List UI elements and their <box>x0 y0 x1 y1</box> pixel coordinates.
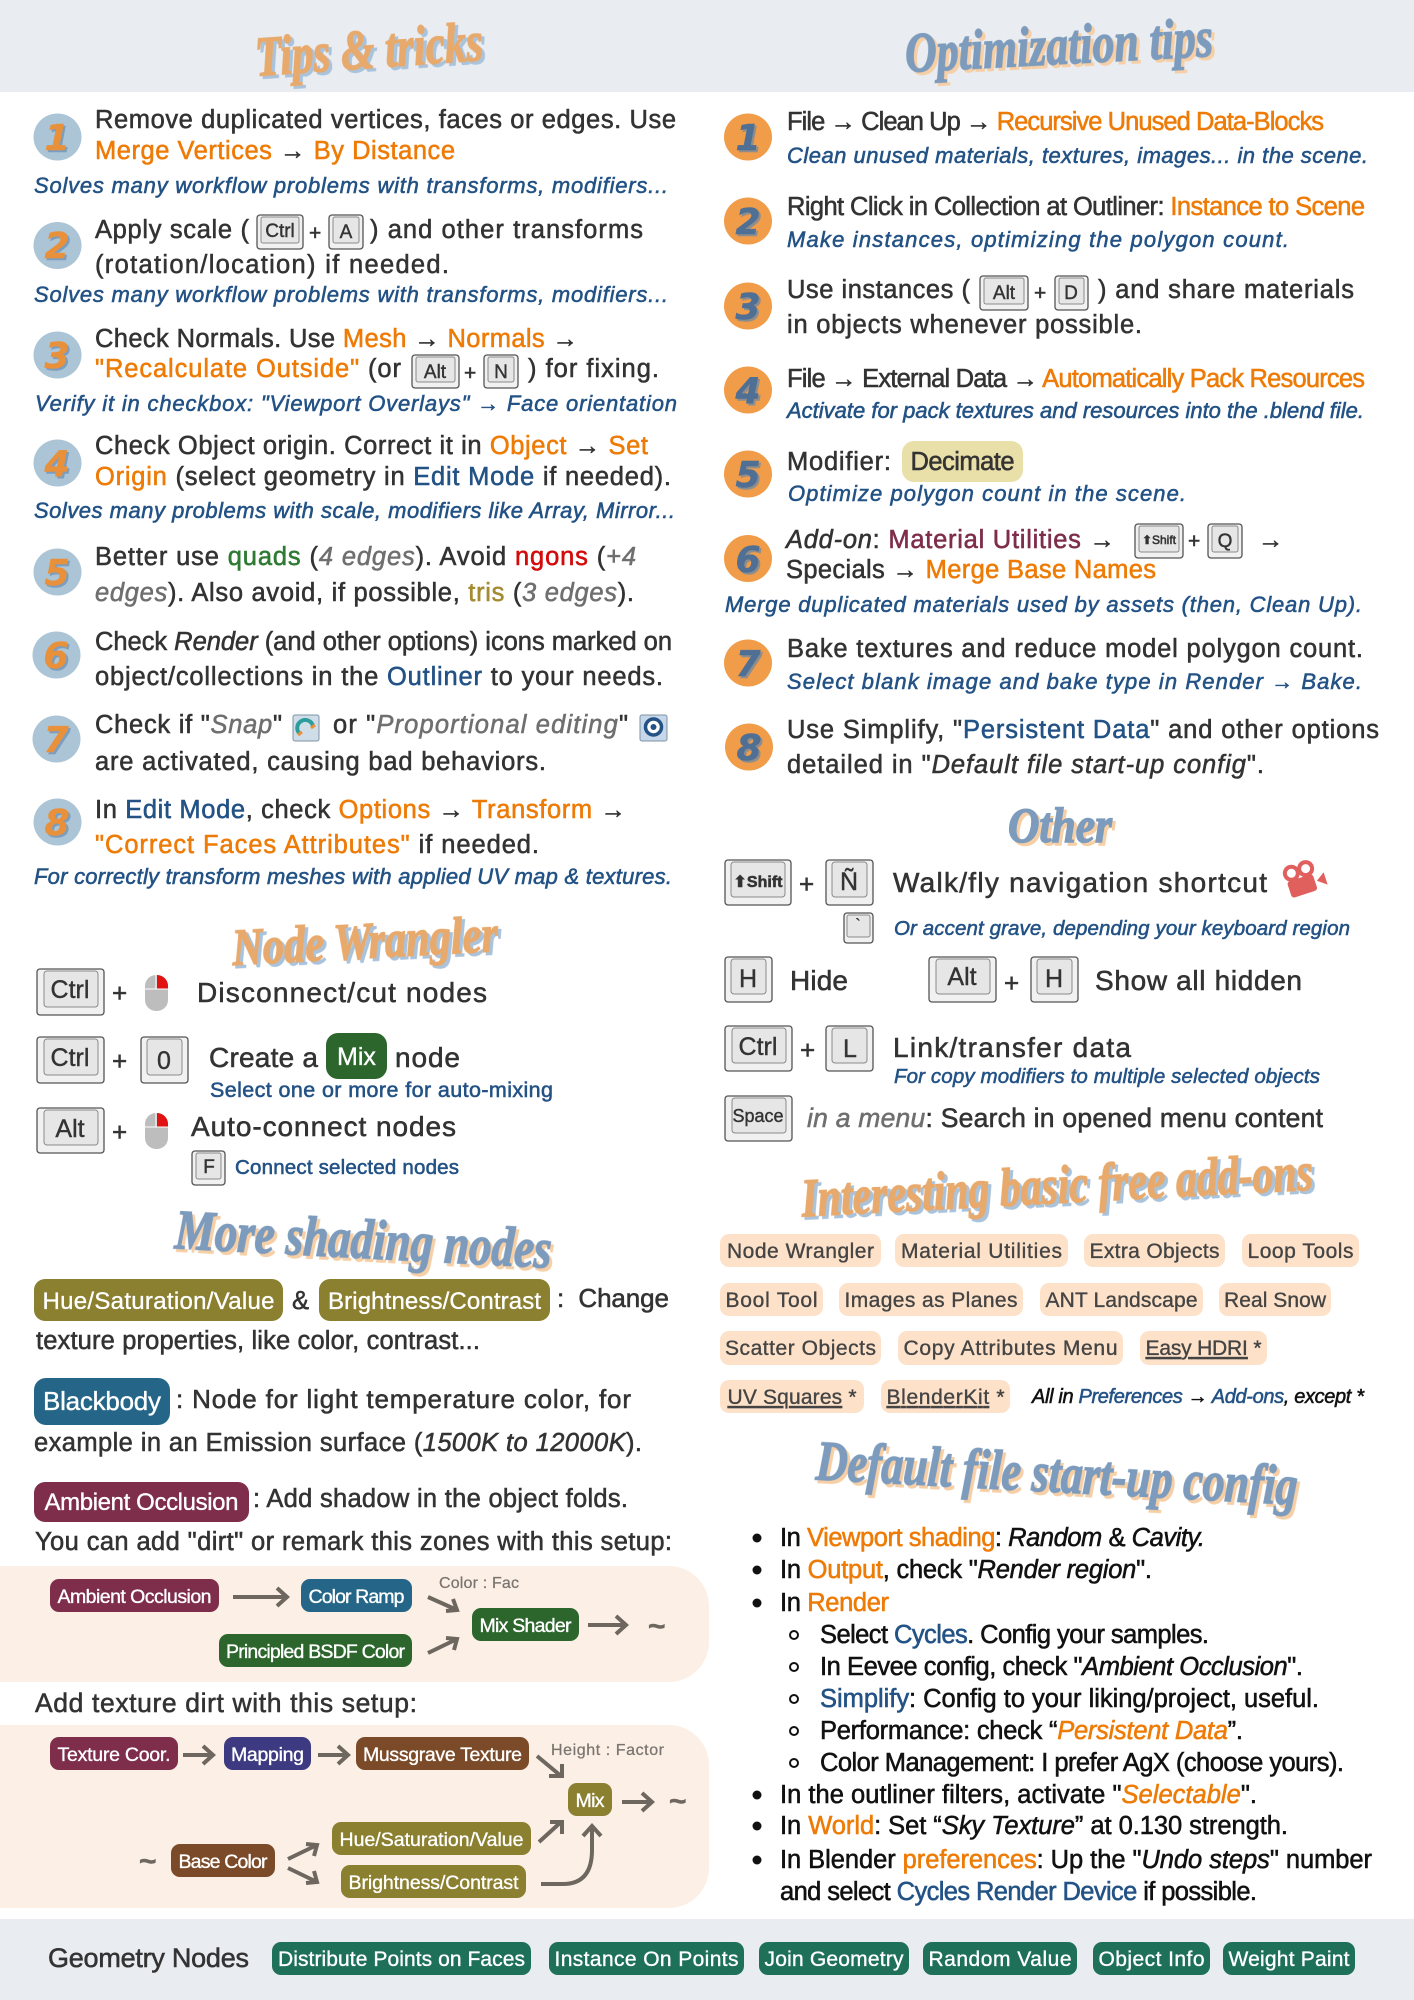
arrow <box>428 1597 457 1611</box>
key: H <box>1031 957 1078 1002</box>
tip 4 note: Solves many problems with scale, modifiers like Array, Mirror... <box>34 498 675 523</box>
pill: Decimate: Decimate <box>910 448 1014 476</box>
tip 1 text: Remove duplicated vertices, faces or edges. Use <box>95 106 676 134</box>
number badge 7 <box>32 716 80 762</box>
label: create a: Create a <box>209 1042 318 1073</box>
note: Or accent grave, depending your keyboard region <box>894 917 1350 940</box>
pill: Object Info <box>1093 1942 1210 1975</box>
tip 2 <box>34 215 668 307</box>
pill: Extra Objects: Extra Objects <box>1090 1240 1220 1263</box>
sub-item: eevee: In Eevee config, check "Ambient Occlusion". <box>820 1653 1303 1681</box>
item: preferences line 2: and select Cycles Render Device if possible. <box>780 1878 1257 1906</box>
node: Mapping: Mapping <box>231 1744 304 1766</box>
arrow <box>539 1822 562 1842</box>
description line 2: texture properties, like color, contrast... <box>36 1327 480 1355</box>
pill: UV Squares: UV Squares * <box>728 1386 856 1409</box>
arrow <box>288 1844 317 1859</box>
key: Ctrl <box>257 215 303 249</box>
number badge 5: 5 <box>44 553 70 594</box>
node pill: Ambient Occlusion: Ambient Occlusion <box>44 1489 238 1516</box>
tip 4 line 2: Origin (select geometry in Edit Mode if needed). <box>95 463 671 491</box>
label: auto-connect: Auto-connect nodes <box>191 1111 456 1142</box>
item: world: In World: Set “Sky Texture” at 0.130 strength. <box>780 1812 1288 1840</box>
plus: + <box>464 362 476 385</box>
node: Brightness/Contrast <box>341 1865 526 1898</box>
opt tip 5 <box>724 441 1186 506</box>
key: Shift: ⬆Shift <box>1142 533 1177 547</box>
opt tip 3 <box>724 276 1354 339</box>
line 2: in objects whenever possible. <box>787 311 1142 339</box>
pill: Weight Paint: Weight Paint <box>1228 1948 1350 1971</box>
number badge 4 <box>34 440 82 486</box>
note: Activate for pack textures and resources into the .blend file. <box>785 398 1364 423</box>
key: Q <box>1208 524 1242 558</box>
shortcut: alt right click <box>37 1108 459 1185</box>
pill: UV Squares <box>720 1380 864 1413</box>
item: output: In Output, check "Render region". <box>780 1556 1152 1584</box>
text: Right Click in Collection at Outliner: Instance to Scene <box>787 193 1365 221</box>
label: walk fly: Walk/fly navigation shortcut <box>893 867 1267 898</box>
title: Node Wrangler: Node Wrangler <box>230 906 500 977</box>
key: L <box>826 1026 873 1071</box>
label: hide: Hide <box>790 965 848 996</box>
text: Use instances ( <box>787 276 970 304</box>
number badge 1: 1 <box>735 118 761 159</box>
opt tip 1 <box>724 108 1368 168</box>
tip 4 text: Check Object origin. Correct it in Object → Set <box>95 432 648 460</box>
node pill: Hue/Saturation/Value: Hue/Saturation/Value <box>42 1288 274 1315</box>
node: Principled BSDF Color: Principled BSDF Color <box>226 1641 406 1663</box>
opt tip 7 <box>724 635 1363 694</box>
pill: Random Value: Random Value <box>928 1948 1072 1971</box>
key: 0 <box>141 1037 188 1083</box>
number badge 6: 6 <box>735 540 761 581</box>
pill: Bool Tool: Bool Tool <box>726 1289 818 1312</box>
pill: ANT Landscape <box>1040 1283 1203 1316</box>
plus: + <box>309 222 321 245</box>
pill: Material Utilities: Material Utilities <box>901 1240 1062 1263</box>
band background <box>0 1919 1414 2000</box>
key: Ctrl <box>37 1037 104 1083</box>
number badge 7: 7 <box>735 644 761 685</box>
tip 1 note: Solves many workflow problems with transforms, modifiers... <box>34 173 668 198</box>
number badge 5: 5 <box>735 455 761 496</box>
footer band: geometry nodes <box>0 1919 1414 2000</box>
sub-item: simplify: Simplify: Config to your liking/project, useful. <box>820 1685 1319 1713</box>
key: Ñ: Ñ <box>840 867 858 896</box>
text: Use Simplify, "Persistent Data" and other options <box>787 716 1379 744</box>
tip 2 note: Solves many workflow problems with transforms, modifiers... <box>34 282 668 307</box>
text: File → External Data → Automatically Pack Resources <box>787 365 1365 393</box>
node: Texture Coor. <box>50 1737 178 1770</box>
key: accent grave: ` <box>856 916 860 933</box>
key: Ñ <box>826 860 873 905</box>
icon: mouse <box>145 1113 168 1149</box>
symbol: tilde: ~ <box>648 1610 666 1643</box>
label: search: in a menu: Search in opened menu content <box>807 1103 1324 1133</box>
description: : Add shadow in the object folds. <box>253 1485 628 1513</box>
label: Color Fac: Color : Fac <box>439 1575 519 1592</box>
key: Ctrl: Ctrl <box>265 221 295 242</box>
icon: mouse <box>145 975 168 1011</box>
note: For copy modifiers to multiple selected objects <box>894 1065 1320 1088</box>
pill: BlenderKit <box>881 1380 1010 1413</box>
plus: + <box>112 1117 127 1147</box>
node pill: Blackbody <box>34 1378 170 1425</box>
number badge 8 <box>34 798 82 846</box>
node pill: Blackbody: Blackbody <box>43 1386 161 1416</box>
plus: + <box>800 1035 815 1065</box>
label: disconnect: Disconnect/cut nodes <box>197 977 487 1008</box>
pill: Material Utilities <box>895 1234 1068 1267</box>
node pill: Mix: Mix <box>337 1043 376 1071</box>
number badge 7: 7 <box>43 720 69 761</box>
panel: default config list <box>752 1524 1372 1906</box>
panel: tips and tricks list <box>32 106 677 889</box>
pill: Bool Tool <box>720 1283 823 1316</box>
node: Color Ramp: Color Ramp <box>308 1586 405 1608</box>
note: Select blank image and bake type in Render → Bake. <box>787 669 1362 694</box>
description: : Node for light temperature color, for <box>176 1384 631 1414</box>
tip 3 <box>34 325 677 416</box>
arrow <box>622 1793 652 1811</box>
arrow <box>537 1756 562 1776</box>
sub-item: cycles: Select Cycles. Config your samples. <box>820 1621 1209 1649</box>
icon: proportional editing <box>640 715 667 741</box>
title: Other: Other <box>1008 797 1112 853</box>
note: Clean unused materials, textures, images... in the scene. <box>787 143 1368 168</box>
panel: dirt setup diagram <box>0 1566 709 1682</box>
label: Height Factor: Height : Factor <box>551 1742 665 1759</box>
tip 6 text: Check Render (and other options) icons marked on <box>95 628 672 656</box>
pill: Loop Tools <box>1242 1234 1359 1267</box>
pill: Easy HDRI: Easy HDRI * <box>1146 1337 1262 1360</box>
text end: ) and share materials <box>1098 276 1354 304</box>
key: Ctrl <box>725 1026 792 1071</box>
pill: Images as Planes <box>839 1283 1023 1316</box>
pill: Scatter Objects <box>720 1331 881 1365</box>
description line 2: You can add "dirt" or remark this zones with this setup: <box>35 1528 672 1556</box>
note: Optimize polygon count in the scene. <box>788 481 1186 506</box>
pill: Distribute Points on Faces <box>272 1942 531 1975</box>
pill: Real Snow <box>1219 1283 1331 1316</box>
symbol: tilde: ~ <box>139 1845 157 1878</box>
pill: Extra Objects <box>1084 1234 1225 1267</box>
node pill: Ambient Occlusion <box>34 1482 249 1522</box>
text: Bake textures and reduce model polygon count. <box>787 635 1363 663</box>
heading: texture dirt setup: Add texture dirt with this setup: <box>35 1688 417 1718</box>
opt tip 6 <box>724 524 1362 617</box>
number badge 8: 8 <box>44 803 70 844</box>
pill: Decimate <box>902 441 1023 482</box>
node pill: Mix <box>326 1033 387 1079</box>
tip 5 text: Better use quads (4 edges). Avoid ngons (+4 <box>95 543 636 571</box>
key: F: F <box>203 1157 215 1178</box>
number badge 4 <box>724 366 772 414</box>
pill: Weight Paint <box>1223 1942 1355 1975</box>
key: Alt <box>37 1108 104 1153</box>
number badge 1 <box>724 114 772 160</box>
tip 5 <box>34 543 636 607</box>
arrow <box>428 1638 457 1653</box>
tip 7 text: Check if "Snap" <box>95 711 282 739</box>
plus: + <box>112 978 127 1008</box>
key: Ctrl: Ctrl <box>739 1033 777 1061</box>
item: preferences: In Blender preferences: Up the "Undo steps" number <box>780 1846 1372 1874</box>
pill: Scatter Objects: Scatter Objects <box>725 1337 876 1360</box>
tip 3 text: Check Normals. Use Mesh → Normals → <box>95 325 578 353</box>
key: H: H <box>739 965 757 993</box>
key: A <box>329 215 363 249</box>
pill: Loop Tools: Loop Tools <box>1248 1240 1354 1263</box>
opt tip 4 <box>724 365 1365 423</box>
tip 3 note: Verify it in checkbox: "Viewport Overlays" → Face orientation <box>35 391 677 416</box>
number badge 8 <box>725 724 773 770</box>
number badge 3 <box>724 282 772 330</box>
arrow <box>588 1616 626 1634</box>
key: Alt <box>980 276 1028 310</box>
key: N <box>484 355 518 388</box>
note: Merge duplicated materials used by assets (then, Clean Up). <box>725 592 1362 617</box>
key: 0: 0 <box>157 1047 171 1075</box>
key: A: A <box>340 222 353 243</box>
title: More shading nodes: More shading nodes <box>173 1199 553 1281</box>
item: render: In Render <box>780 1589 890 1617</box>
pill: Real Snow: Real Snow <box>1224 1289 1327 1312</box>
tip 7 <box>32 711 667 776</box>
node: Ambient Occlusion <box>50 1579 219 1612</box>
arrow: curved <box>541 1826 601 1884</box>
item: outliner: In the outliner filters, activate "Selectable". <box>780 1781 1257 1809</box>
plus: + <box>1034 282 1046 305</box>
footer heading: Geometry Nodes <box>48 1943 249 1973</box>
key: Ctrl: Ctrl <box>51 976 89 1004</box>
tip 7 text mid: or "Proportional editing" <box>333 711 628 739</box>
number badge 1 <box>34 114 82 160</box>
tip 3 line 2: "Recalculate Outside" (or <box>95 355 402 383</box>
sub-item: performance: Performance: check “Persistent Data”. <box>820 1717 1243 1745</box>
line 2: detailed in "Default file start-up config". <box>787 751 1264 779</box>
tip 7 line 2: are activated, causing bad behaviors. <box>95 748 546 776</box>
tip 1 <box>34 106 676 198</box>
icon: snap magnet <box>293 715 319 741</box>
node: Texture Coor.: Texture Coor. <box>58 1744 170 1766</box>
tip 5 line 2: edges). Also avoid, if possible, tris (3 edges). <box>95 579 634 607</box>
pill: Join Geometry <box>759 1942 909 1975</box>
description line 2: example in an Emission surface (1500K to 12000K). <box>34 1429 642 1457</box>
node: Base Color: Base Color <box>178 1851 268 1873</box>
number badge 5 <box>724 450 772 498</box>
pill: Images as Planes: Images as Planes <box>844 1289 1018 1312</box>
pill: Instance On Points <box>549 1942 744 1975</box>
node: Mussgrave Texture <box>356 1737 529 1770</box>
node: Mix <box>568 1783 612 1816</box>
node: Mapping <box>224 1737 311 1770</box>
number badge 7 <box>724 640 772 686</box>
line 2: Specials → Merge Base Names <box>786 556 1156 584</box>
opt tip 2 <box>724 193 1365 252</box>
key: D <box>1055 276 1088 310</box>
item: viewport shading: In Viewport shading: Random & Cavity. <box>780 1524 1205 1552</box>
key: Shift <box>725 860 791 905</box>
key: Alt: Alt <box>55 1115 85 1143</box>
key: Ctrl <box>37 969 104 1015</box>
key: Q: Q <box>1218 531 1232 552</box>
number badge 3: 3 <box>735 287 761 328</box>
node: Hue/Saturation/Value: Hue/Saturation/Value <box>340 1829 524 1851</box>
node: Color Ramp <box>301 1579 412 1612</box>
number badge 2: 2 <box>735 202 761 243</box>
pill: Join Geometry: Join Geometry <box>764 1948 904 1971</box>
number badge 8: 8 <box>736 728 762 769</box>
note: preferences: All in Preferences → Add-ons, except * <box>1031 1386 1365 1408</box>
icon: camera <box>1283 858 1328 898</box>
panel: add-ons <box>720 1234 1365 1413</box>
node: Hue/Saturation/Value <box>332 1822 531 1855</box>
label: show all hidden: Show all hidden <box>1095 965 1302 996</box>
arrow <box>288 1868 317 1883</box>
number badge 3: 3 <box>44 336 70 377</box>
number badge 1: 1 <box>44 118 70 159</box>
tip 8 text: In Edit Mode, check Options → Transform → <box>95 796 626 824</box>
pill: Node Wrangler <box>720 1234 881 1267</box>
text: Modifier: <box>787 448 891 476</box>
tip 2 line 2: (rotation/location) if needed. <box>95 251 449 279</box>
key: Shift <box>1135 524 1183 558</box>
description: : Change <box>557 1283 669 1313</box>
node pill: Hue/Saturation/Value <box>34 1279 283 1321</box>
tip 6 <box>32 628 672 691</box>
key: Alt <box>412 355 459 388</box>
tip 6 line 2: object/collections in the Outliner to your needs. <box>95 663 663 691</box>
panel background <box>0 1725 709 1908</box>
opt tip 8 <box>725 716 1379 779</box>
note: Make instances, optimizing the polygon count. <box>787 227 1289 252</box>
pill: BlenderKit: BlenderKit * <box>886 1386 1004 1409</box>
node pill: Brightness/Contrast: Brightness/Contrast <box>328 1288 541 1315</box>
tip 2 text start: Apply scale ( <box>95 216 250 244</box>
arrow <box>233 1588 287 1606</box>
key: D: D <box>1064 283 1078 304</box>
note: Select one or more for auto-mixing <box>210 1078 553 1102</box>
shortcut: ctrl right click <box>37 969 487 1015</box>
key: Alt: Alt <box>993 283 1016 304</box>
symbol: tilde: ~ <box>669 1785 687 1818</box>
number badge 5 <box>34 548 82 596</box>
number badge 4: 4 <box>734 371 761 412</box>
panel background <box>0 1566 709 1682</box>
node: Mix Shader <box>472 1608 579 1641</box>
key: Space: Space <box>732 1106 784 1126</box>
text: File → Clean Up → Recursive Unused Data-Blocks <box>787 108 1324 136</box>
number badge 2: 2 <box>44 226 70 267</box>
pill: Random Value <box>923 1942 1077 1975</box>
tip 4 <box>34 432 675 523</box>
pill: Object Info: Object Info <box>1098 1948 1204 1971</box>
number badge 6 <box>32 632 80 678</box>
key: Space <box>725 1096 792 1141</box>
number badge 2 <box>724 198 772 244</box>
number badge 4: 4 <box>43 444 70 485</box>
sub-item: color management: Color Management: I prefer AgX (choose yours). <box>820 1749 1344 1777</box>
key: L: L <box>843 1035 857 1063</box>
node: Ambient Occlusion: Ambient Occlusion <box>58 1586 212 1608</box>
plus: + <box>1188 530 1200 553</box>
number badge 2 <box>34 222 82 269</box>
pill: Easy HDRI <box>1140 1331 1267 1365</box>
pill: Copy Attributes Menu <box>898 1331 1123 1365</box>
panel: texture dirt diagram <box>0 1725 709 1908</box>
key: Shift: ⬆Shift <box>734 874 783 891</box>
tip 3 text end: ) for fixing. <box>528 355 659 383</box>
plus: + <box>112 1046 127 1076</box>
key: Alt <box>929 957 996 1002</box>
key: accent grave <box>844 913 873 943</box>
number badge 3 <box>34 332 82 378</box>
pill: Copy Attributes Menu: Copy Attributes Menu <box>904 1337 1118 1360</box>
title: Optimization tips: Optimization tips <box>903 7 1214 85</box>
plus: + <box>799 869 814 899</box>
key: Ctrl: Ctrl <box>51 1044 89 1072</box>
panel: optimization tips <box>724 108 1379 779</box>
panel: more shading nodes <box>34 1279 672 1556</box>
tip 8 note: For correctly transform meshes with applied UV map & textures. <box>34 864 672 889</box>
key: N: N <box>494 362 508 383</box>
tip 8 <box>34 796 672 889</box>
plus: + <box>1004 968 1019 998</box>
panel: other shortcuts <box>725 858 1350 1141</box>
node: Principled BSDF Color <box>219 1634 412 1667</box>
arrow <box>318 1746 348 1764</box>
key: Alt: Alt <box>424 362 447 383</box>
text: Add-on: Material Utilities → <box>784 526 1115 554</box>
arrow <box>183 1746 213 1764</box>
pill: Instance On Points: Instance On Points <box>554 1948 738 1971</box>
tip 1 action: Merge Vertices → By Distance <box>95 137 455 165</box>
tip 2 text end: ) and other transforms <box>370 216 643 244</box>
shortcut: ctrl 0 <box>37 1033 553 1102</box>
tip 8 line 2: "Correct Faces Attributes" if needed. <box>95 831 539 859</box>
node pill: Brightness/Contrast <box>319 1279 550 1321</box>
key: F <box>192 1151 225 1185</box>
label: link transfer: Link/transfer data <box>893 1032 1131 1063</box>
pill: ANT Landscape: ANT Landscape <box>1046 1289 1198 1312</box>
node: Mussgrave Texture: Mussgrave Texture <box>363 1744 522 1766</box>
header band <box>0 0 1414 92</box>
node: Brightness/Contrast: Brightness/Contrast <box>348 1872 519 1894</box>
node: Base Color <box>171 1844 275 1877</box>
pill: Node Wrangler: Node Wrangler <box>727 1240 874 1263</box>
ampersand: & <box>292 1287 309 1315</box>
key: H <box>725 957 772 1002</box>
panel: node wrangler shortcuts <box>37 969 553 1185</box>
node: Mix Shader: Mix Shader <box>480 1615 572 1637</box>
pill: Distribute Points on Faces: Distribute Points on Faces <box>278 1948 525 1971</box>
node: Mix: Mix <box>576 1790 605 1812</box>
arrow: → <box>1258 526 1284 554</box>
key: H: H <box>1045 965 1063 993</box>
note: Connect selected nodes <box>235 1156 459 1179</box>
label: node: node <box>395 1042 460 1073</box>
key: Alt: Alt <box>947 963 977 991</box>
number badge 6 <box>724 535 772 582</box>
title: Tips & tricks: Tips & tricks <box>253 11 485 89</box>
number badge 6: 6 <box>43 636 69 677</box>
